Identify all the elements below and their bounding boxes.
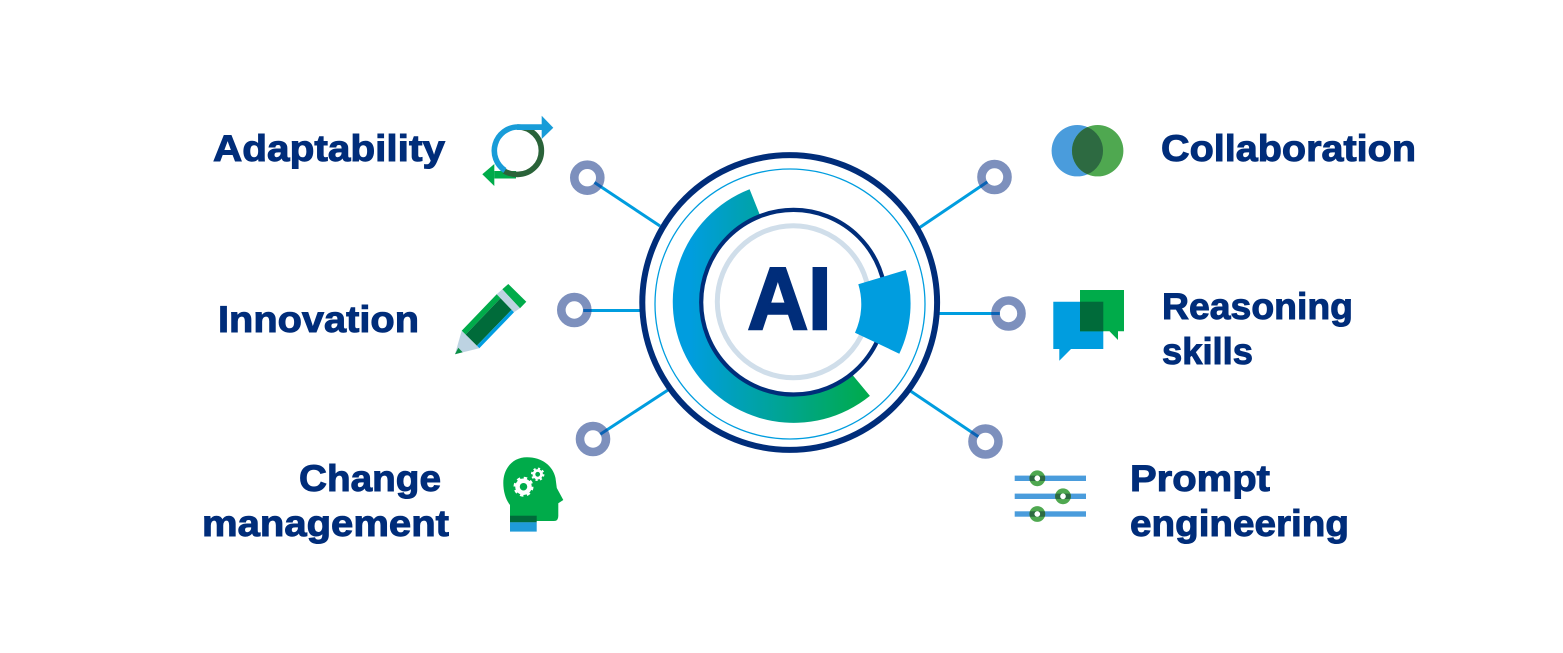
- icon: pencil: [455, 284, 526, 354]
- thin ring: [655, 169, 925, 439]
- label: Reasoning skills: skills: [1162, 330, 1253, 372]
- label: Prompt engineering: engineering: [1130, 502, 1349, 544]
- label: Reasoning skills: [1162, 285, 1353, 372]
- icon: head with gears: [503, 457, 563, 532]
- label: Innovation: Innovation: [218, 298, 419, 340]
- connector lines: [583, 182, 1000, 437]
- connector nodes: [561, 164, 1022, 454]
- icon: speech bubbles: [1053, 290, 1124, 361]
- icon: sliders: [1015, 473, 1086, 519]
- label: Change management: [202, 457, 450, 544]
- label: Change management: management: [202, 502, 450, 544]
- label: Change management: Change: [299, 457, 441, 499]
- line and node overlaps: [583, 182, 1000, 437]
- icon: adaptability arrows: [482, 116, 553, 186]
- light ring: [717, 226, 869, 378]
- icon: overlapping circles: [1052, 125, 1123, 176]
- outer ring: [642, 155, 937, 450]
- label: Prompt engineering: [1130, 457, 1349, 544]
- gears: [515, 468, 544, 496]
- inner ring: [701, 210, 886, 394]
- label: Prompt engineering: Prompt: [1130, 457, 1271, 499]
- AI lettering: AI: [748, 249, 832, 348]
- label: Reasoning skills: Reasoning: [1162, 285, 1353, 327]
- label: Adaptability: Adaptability: [213, 127, 445, 169]
- gradient arc: [673, 189, 870, 423]
- blue wedge: [855, 270, 911, 354]
- label: Collaboration: Collaboration: [1161, 127, 1416, 169]
- central AI dial: [642, 155, 937, 450]
